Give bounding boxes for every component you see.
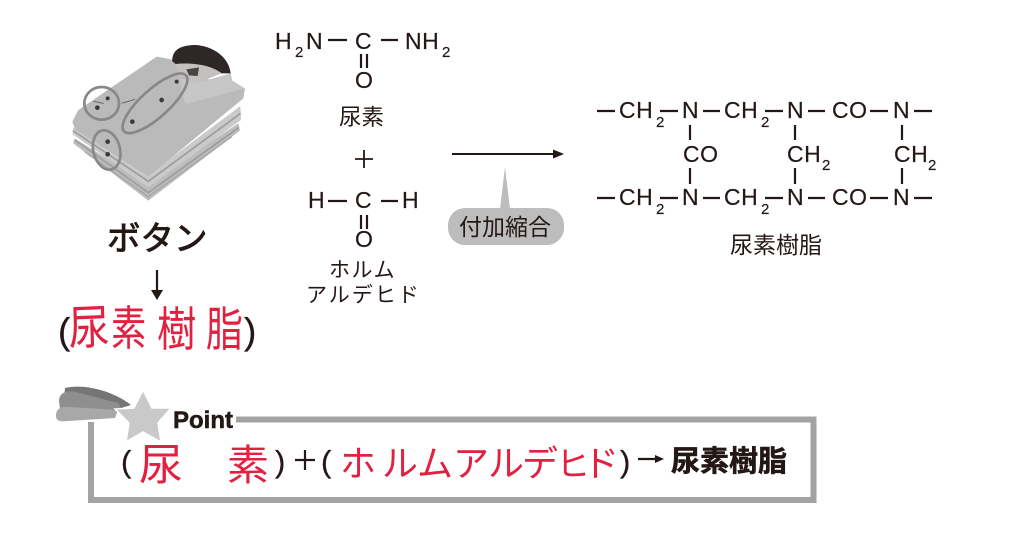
equation: ) [275, 444, 285, 479]
formula: urea: O [355, 67, 373, 93]
formula: formaldehyde: C [355, 187, 372, 213]
equation: 素 [227, 432, 269, 493]
equation: ル [382, 435, 418, 487]
handwritten answer: urea resin: 尿 [67, 289, 110, 359]
formula: urea: H [275, 28, 292, 54]
equation: ア [453, 435, 489, 487]
top chain: CH [619, 97, 653, 123]
label: formaldehyde [306, 259, 421, 307]
formula: formaldehyde: O [355, 226, 373, 252]
buttons [93, 80, 179, 157]
cross links [683, 125, 936, 184]
point label: Point [173, 407, 233, 434]
top chain: CO [832, 97, 868, 123]
formula: formaldehyde [308, 187, 419, 252]
plus sign [355, 150, 373, 168]
label: urea: 尿素 [339, 105, 384, 130]
equation [121, 429, 787, 493]
formula: urea: N [306, 28, 323, 54]
formula: urea: 2 [442, 44, 450, 61]
formula: urea resin structure [597, 97, 936, 218]
cross links: CH [787, 141, 821, 167]
bottom chain: N [787, 184, 804, 210]
cross links: CH [894, 141, 928, 167]
top chain: 2 [761, 114, 769, 131]
handwritten answer: urea resin: 脂 [206, 293, 243, 360]
arrow: reaction [452, 150, 564, 158]
top chain: CH [724, 97, 758, 123]
equation: ム [417, 435, 453, 487]
collar [172, 45, 245, 104]
handwritten answer: urea resin: ) [244, 311, 256, 352]
equation: デ [522, 435, 558, 487]
equation: 尿素樹脂 [671, 445, 787, 478]
heading: button label: ボタン [107, 221, 208, 258]
icon: folded shirt with circled buttons [72, 45, 245, 201]
button rings [84, 65, 195, 173]
panel: point summary [56, 387, 814, 500]
icon: shooting star [56, 387, 171, 442]
equation: ( [321, 444, 332, 479]
formula: urea: C [355, 28, 372, 54]
bottom chain: 2 [761, 201, 769, 218]
top chain [597, 97, 932, 131]
formula: urea: 2 [295, 44, 303, 61]
equation: ) [620, 444, 630, 479]
bottom chain: CH [619, 184, 653, 210]
bottom chain: CO [832, 184, 868, 210]
equation: ( [121, 444, 132, 479]
formula: formaldehyde: H [402, 187, 419, 213]
top chain: 2 [656, 114, 664, 131]
frame [91, 420, 814, 500]
equation: ホ [340, 435, 376, 487]
label: formaldehyde: アルデヒド [306, 284, 421, 307]
bottom chain: N [682, 184, 699, 210]
top chain: N [787, 97, 804, 123]
top shirt body [72, 57, 245, 177]
bottom chain: 2 [656, 201, 664, 218]
equation: ヒ [556, 437, 590, 486]
handwritten answer: urea resin: 素 [111, 291, 146, 359]
handwritten answer: urea resin: ( [58, 311, 71, 352]
formula: urea [275, 28, 450, 93]
callout: addition condensation [448, 167, 564, 245]
bottom shirt layers [72, 106, 241, 201]
label: formaldehyde: ホルム [329, 259, 396, 282]
formula: formaldehyde: H [308, 187, 325, 213]
top chain: N [682, 97, 699, 123]
cross links: 2 [822, 157, 830, 174]
cross links: CO [683, 141, 718, 167]
arrow: button to resin [151, 270, 163, 300]
bottom chain: CH [724, 184, 758, 210]
label: urea resin: 尿素樹脂 [730, 232, 822, 258]
formula: urea: NH [405, 28, 439, 54]
bottom chain: N [893, 184, 910, 210]
top chain: N [893, 97, 910, 123]
handwritten answer: urea resin [58, 289, 256, 360]
callout: addition condensation: 付加縮合 [459, 214, 551, 240]
bottom chain [597, 184, 932, 218]
handwritten answer: urea resin: 樹 [157, 292, 196, 360]
cross links: 2 [928, 157, 936, 174]
equation: ド [583, 435, 619, 487]
equation: 尿 [139, 429, 183, 493]
equation: ル [488, 435, 524, 487]
